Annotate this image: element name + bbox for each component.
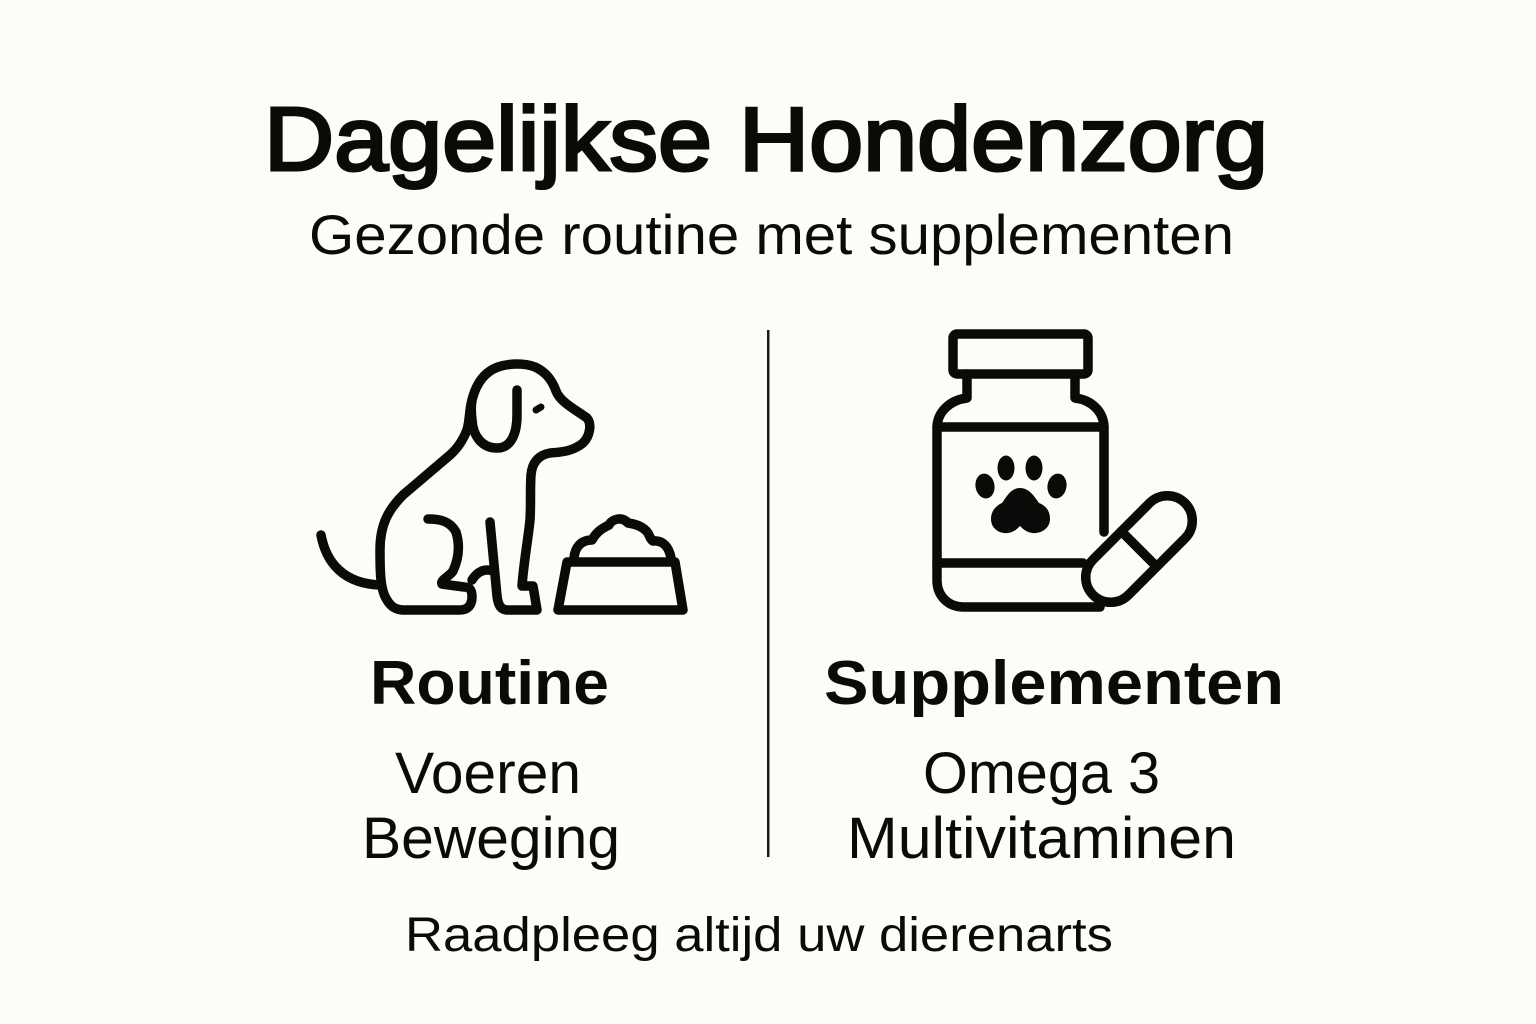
text: beweging: Beweging xyxy=(362,806,620,871)
footer note: Raadpleeg altijd uw dierenarts xyxy=(405,909,1113,962)
heading: routine: Routine xyxy=(370,649,609,718)
panel: supplementen xyxy=(824,334,1284,871)
text: multivitaminen: Multivitaminen xyxy=(847,806,1236,871)
heading: supplementen: Supplementen xyxy=(824,649,1284,718)
icon: sitting dog xyxy=(321,364,590,610)
icon: supplement bottle xyxy=(937,334,1104,607)
title: Dagelijkse Hondenzorg xyxy=(264,90,1268,190)
icon: capsule xyxy=(1075,485,1203,613)
text: omega 3: Omega 3 xyxy=(923,741,1160,806)
center divider xyxy=(767,330,770,857)
icon: paw print xyxy=(973,456,1069,533)
panel: routine xyxy=(321,364,683,871)
subtitle: Gezonde routine met supplementen xyxy=(309,203,1234,266)
icon: food bowl xyxy=(558,519,683,610)
text: voeren: Voeren xyxy=(395,741,581,806)
